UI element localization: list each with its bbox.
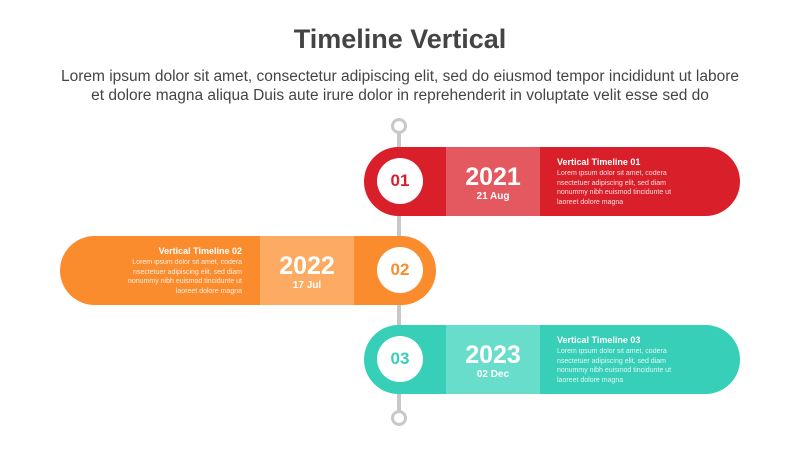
text 01: Lorem ipsum dolor sit amet, codera nsectetuer adipiscing elit, sed diam nonummy nibh euismod tincidunte ut laoreet dolore magna	[557, 170, 671, 206]
panel: timeline 03	[364, 325, 740, 394]
text 03: Vertical Timeline 03	[557, 335, 640, 345]
year block 2023: 02 Dec	[477, 369, 509, 380]
year block 2021	[446, 147, 540, 216]
text 01: Vertical Timeline 01	[557, 157, 640, 167]
number badge 03	[377, 336, 423, 382]
text 03: Lorem ipsum dolor sit amet, codera nsectetuer adipiscing elit, sed diam nonummy nibh euismod tincidunte ut laoreet dolore magna	[557, 348, 671, 384]
number badge 02: 02	[391, 260, 409, 279]
year block 2023	[446, 325, 540, 394]
panel: timeline 02	[60, 236, 436, 305]
year block 2022: 2022	[279, 252, 335, 280]
subtitle: et dolore magna aliqua Duis aute irure dolor in reprehenderit in voluptate velit esse sed do	[91, 87, 709, 104]
number badge 01: 01	[391, 171, 409, 190]
number badge 01	[377, 158, 423, 204]
year block 2021: 2021	[465, 163, 521, 191]
year block 2022: 17 Jul	[293, 280, 321, 291]
vertical timeline line	[391, 118, 407, 426]
panel: timeline 01	[364, 147, 740, 216]
subtitle: Lorem ipsum dolor sit amet, consectetur adipiscing elit, sed do eiusmod tempor incididunt ut labore	[61, 68, 739, 85]
title: Timeline Vertical	[294, 24, 506, 54]
text 02: Vertical Timeline 02	[159, 246, 242, 256]
number badge 03: 03	[391, 349, 409, 368]
year block 2023: 2023	[465, 341, 521, 369]
year block 2021: 21 Aug	[477, 191, 509, 202]
text 02: Lorem ipsum dolor sit amet, codera nsectetuer adipiscing elit, sed diam nonummy nibh euismod tincidunte ut laoreet dolore magna	[128, 259, 242, 294]
number badge 02	[377, 247, 423, 293]
subtitle	[61, 68, 739, 104]
year block 2022	[260, 236, 354, 305]
